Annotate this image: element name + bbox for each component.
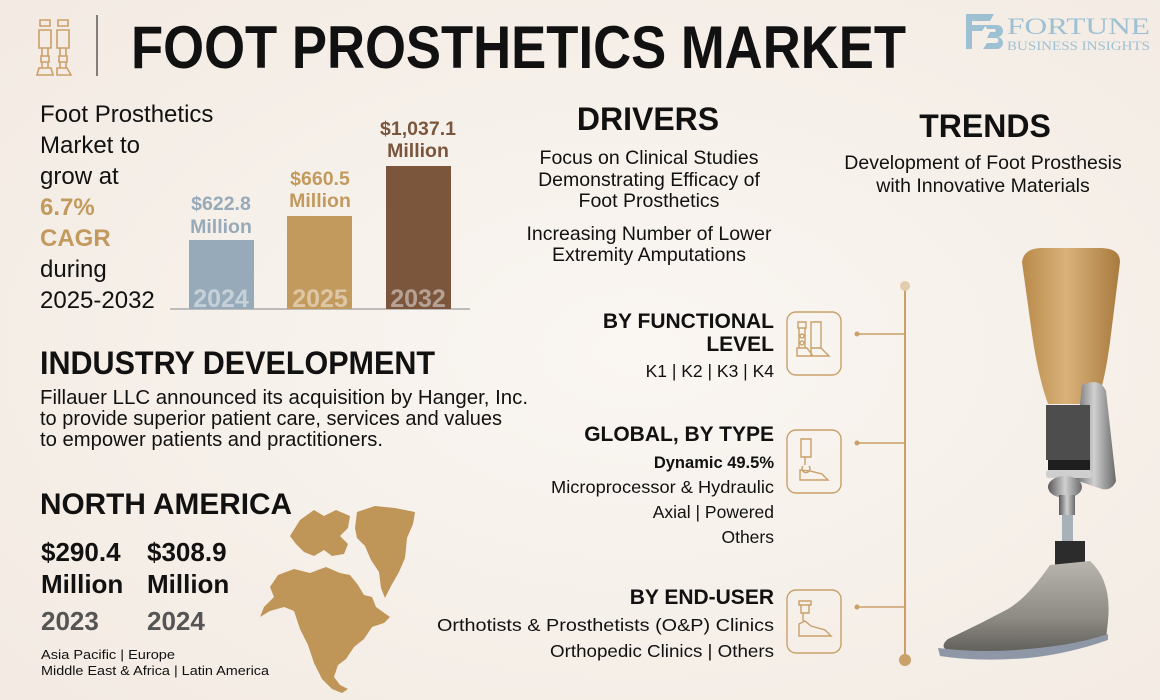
timeline connector (854, 281, 911, 666)
stats: north america values: Million (147, 569, 229, 599)
text block: other regions: Middle East & Africa | Latin America (41, 663, 270, 678)
segment: by end-user: BY END-USER (630, 586, 774, 609)
segment: by functional level: BY FUNCTIONAL (603, 310, 774, 333)
text block: industry development: to empower patients and practitioners. (40, 429, 383, 451)
text block: other regions (41, 647, 270, 678)
segment: by functional level: LEVEL (706, 333, 774, 356)
icon: end-user (787, 590, 841, 653)
heading: trends: TRENDS (919, 108, 1051, 144)
bar chart: market size: Million (190, 216, 252, 238)
text block: drivers: Focus on Clinical Studies (540, 147, 759, 169)
segment: by type: Others (721, 527, 774, 547)
stats: north america values: 2024 (147, 606, 205, 636)
text block: drivers (527, 147, 772, 266)
logo: Fortune Business Insights: BUSINESS INSIGHTS (1007, 39, 1150, 53)
text block: CAGR statement: grow at (40, 163, 119, 190)
text block: trends: with Innovative Materials (875, 175, 1090, 197)
heading: industry development: INDUSTRY DEVELOPMENT (40, 345, 435, 381)
text block: drivers: Demonstrating Efficacy of (538, 169, 760, 191)
bar chart: market size: 2032 (390, 285, 446, 313)
title: FOOT PROSTHETICS MARKET (131, 14, 906, 81)
bar chart: market size: 2025 (292, 285, 348, 313)
stats: north america values: 2023 (41, 606, 99, 636)
segment: by type: GLOBAL, BY TYPE (584, 423, 774, 446)
segment: by functional level (603, 310, 774, 381)
text block: other regions: Asia Pacific | Europe (41, 647, 175, 662)
icon: functional level (787, 312, 841, 375)
icon: type (787, 430, 841, 493)
text block: industry development: to provide superior patient care, services and values (40, 408, 502, 430)
text block: trends (844, 152, 1122, 197)
segment: by type: Dynamic 49.5% (654, 454, 774, 472)
bar chart: market size: Million (387, 140, 449, 162)
bar chart: market size (170, 118, 470, 313)
text block: CAGR statement: CAGR (40, 225, 111, 252)
heading: drivers: DRIVERS (577, 101, 719, 137)
text block: drivers: Increasing Number of Lower (527, 223, 772, 245)
text block: drivers: Foot Prosthetics (579, 190, 720, 212)
text block: CAGR statement: 6.7% (40, 194, 95, 221)
stats: north america values: $308.9 (147, 537, 227, 567)
text block: trends: Development of Foot Prosthesis (844, 152, 1122, 174)
logo: Fortune Business Insights: FORTUNE (1007, 14, 1150, 39)
bar chart: market size: $1,037.1 (380, 118, 456, 140)
logo: Fortune Business Insights (966, 14, 1150, 53)
segment: by type (551, 423, 774, 547)
text block: CAGR statement: during (40, 256, 107, 283)
text block: CAGR statement: 2025-2032 (40, 287, 155, 314)
text block: drivers: Extremity Amputations (552, 244, 746, 266)
text block: CAGR statement (40, 101, 213, 314)
bar chart: market size: $660.5 (290, 168, 350, 190)
bar chart: market size: $622.8 (191, 193, 251, 215)
segment: by type: Microprocessor & Hydraulic (551, 477, 774, 497)
text block: CAGR statement: Foot Prosthetics (40, 101, 213, 128)
text block: CAGR statement: Market to (40, 132, 140, 159)
stats: north america values: Million (41, 569, 123, 599)
segment: by end-user: Orthopedic Clinics | Others (550, 641, 774, 661)
heading: north america: NORTH AMERICA (40, 488, 292, 521)
segment: by end-user (437, 586, 774, 661)
map: north america (260, 506, 415, 693)
bar chart: market size: Million (289, 190, 351, 212)
stats: north america values: $290.4 (41, 537, 121, 567)
segment: by type: Axial | Powered (653, 502, 774, 522)
illustration: prosthetic leg (938, 248, 1120, 660)
segment: by end-user: Orthotists & Prosthetists (O&P) Clinics (437, 615, 774, 635)
segment: by functional level: K1 | K2 | K3 | K4 (646, 361, 774, 381)
bar chart: market size: 2024 (193, 285, 249, 313)
text block: industry development (40, 387, 528, 451)
icon: header prosthetic legs (37, 20, 71, 75)
stats: north america values (41, 537, 229, 636)
text block: industry development: Fillauer LLC announced its acquisition by Hanger, Inc. (40, 387, 528, 409)
